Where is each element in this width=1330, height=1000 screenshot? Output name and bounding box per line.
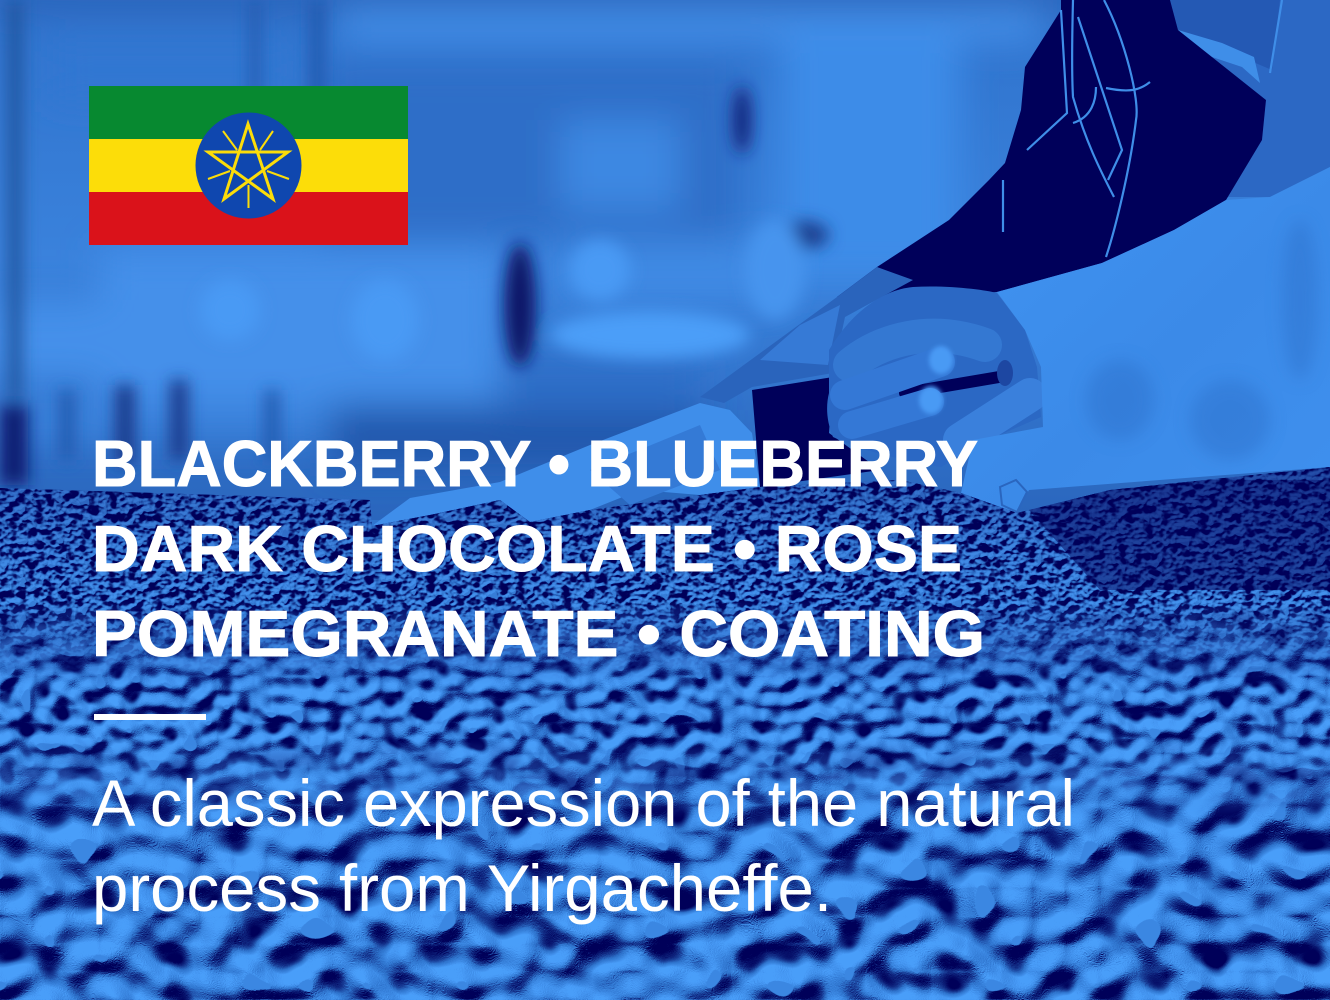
headline: flavour notes (92, 427, 985, 670)
headline: flavour notes: BLACKBERRY • BLUEBERRY (92, 427, 978, 500)
headline: flavour notes: DARK CHOCOLATE • ROSE (92, 512, 962, 585)
photo: upper right of worker (1170, 0, 1330, 197)
photo: worker's hand (827, 287, 1041, 467)
photo: second hand reaching over the beans (372, 403, 760, 526)
flag of Ethiopia (89, 86, 408, 245)
photo: white sleeve (961, 167, 1330, 513)
description text (92, 766, 1075, 925)
photo: coffee beans on the drying bed (0, 460, 1330, 1000)
description text: A classic expression of the natural (92, 766, 1075, 840)
description text: process from Yirgacheffe. (92, 851, 832, 925)
background: blurred drying-bed scene (0, 0, 1330, 520)
photo: gloved arm (700, 267, 913, 487)
flag emblem: yellow star with rays (208, 124, 289, 208)
photo: worker's dark torso with threads (837, 0, 1282, 300)
divider rule (94, 714, 206, 720)
headline: flavour notes: POMEGRANATE • COATING (92, 597, 985, 670)
